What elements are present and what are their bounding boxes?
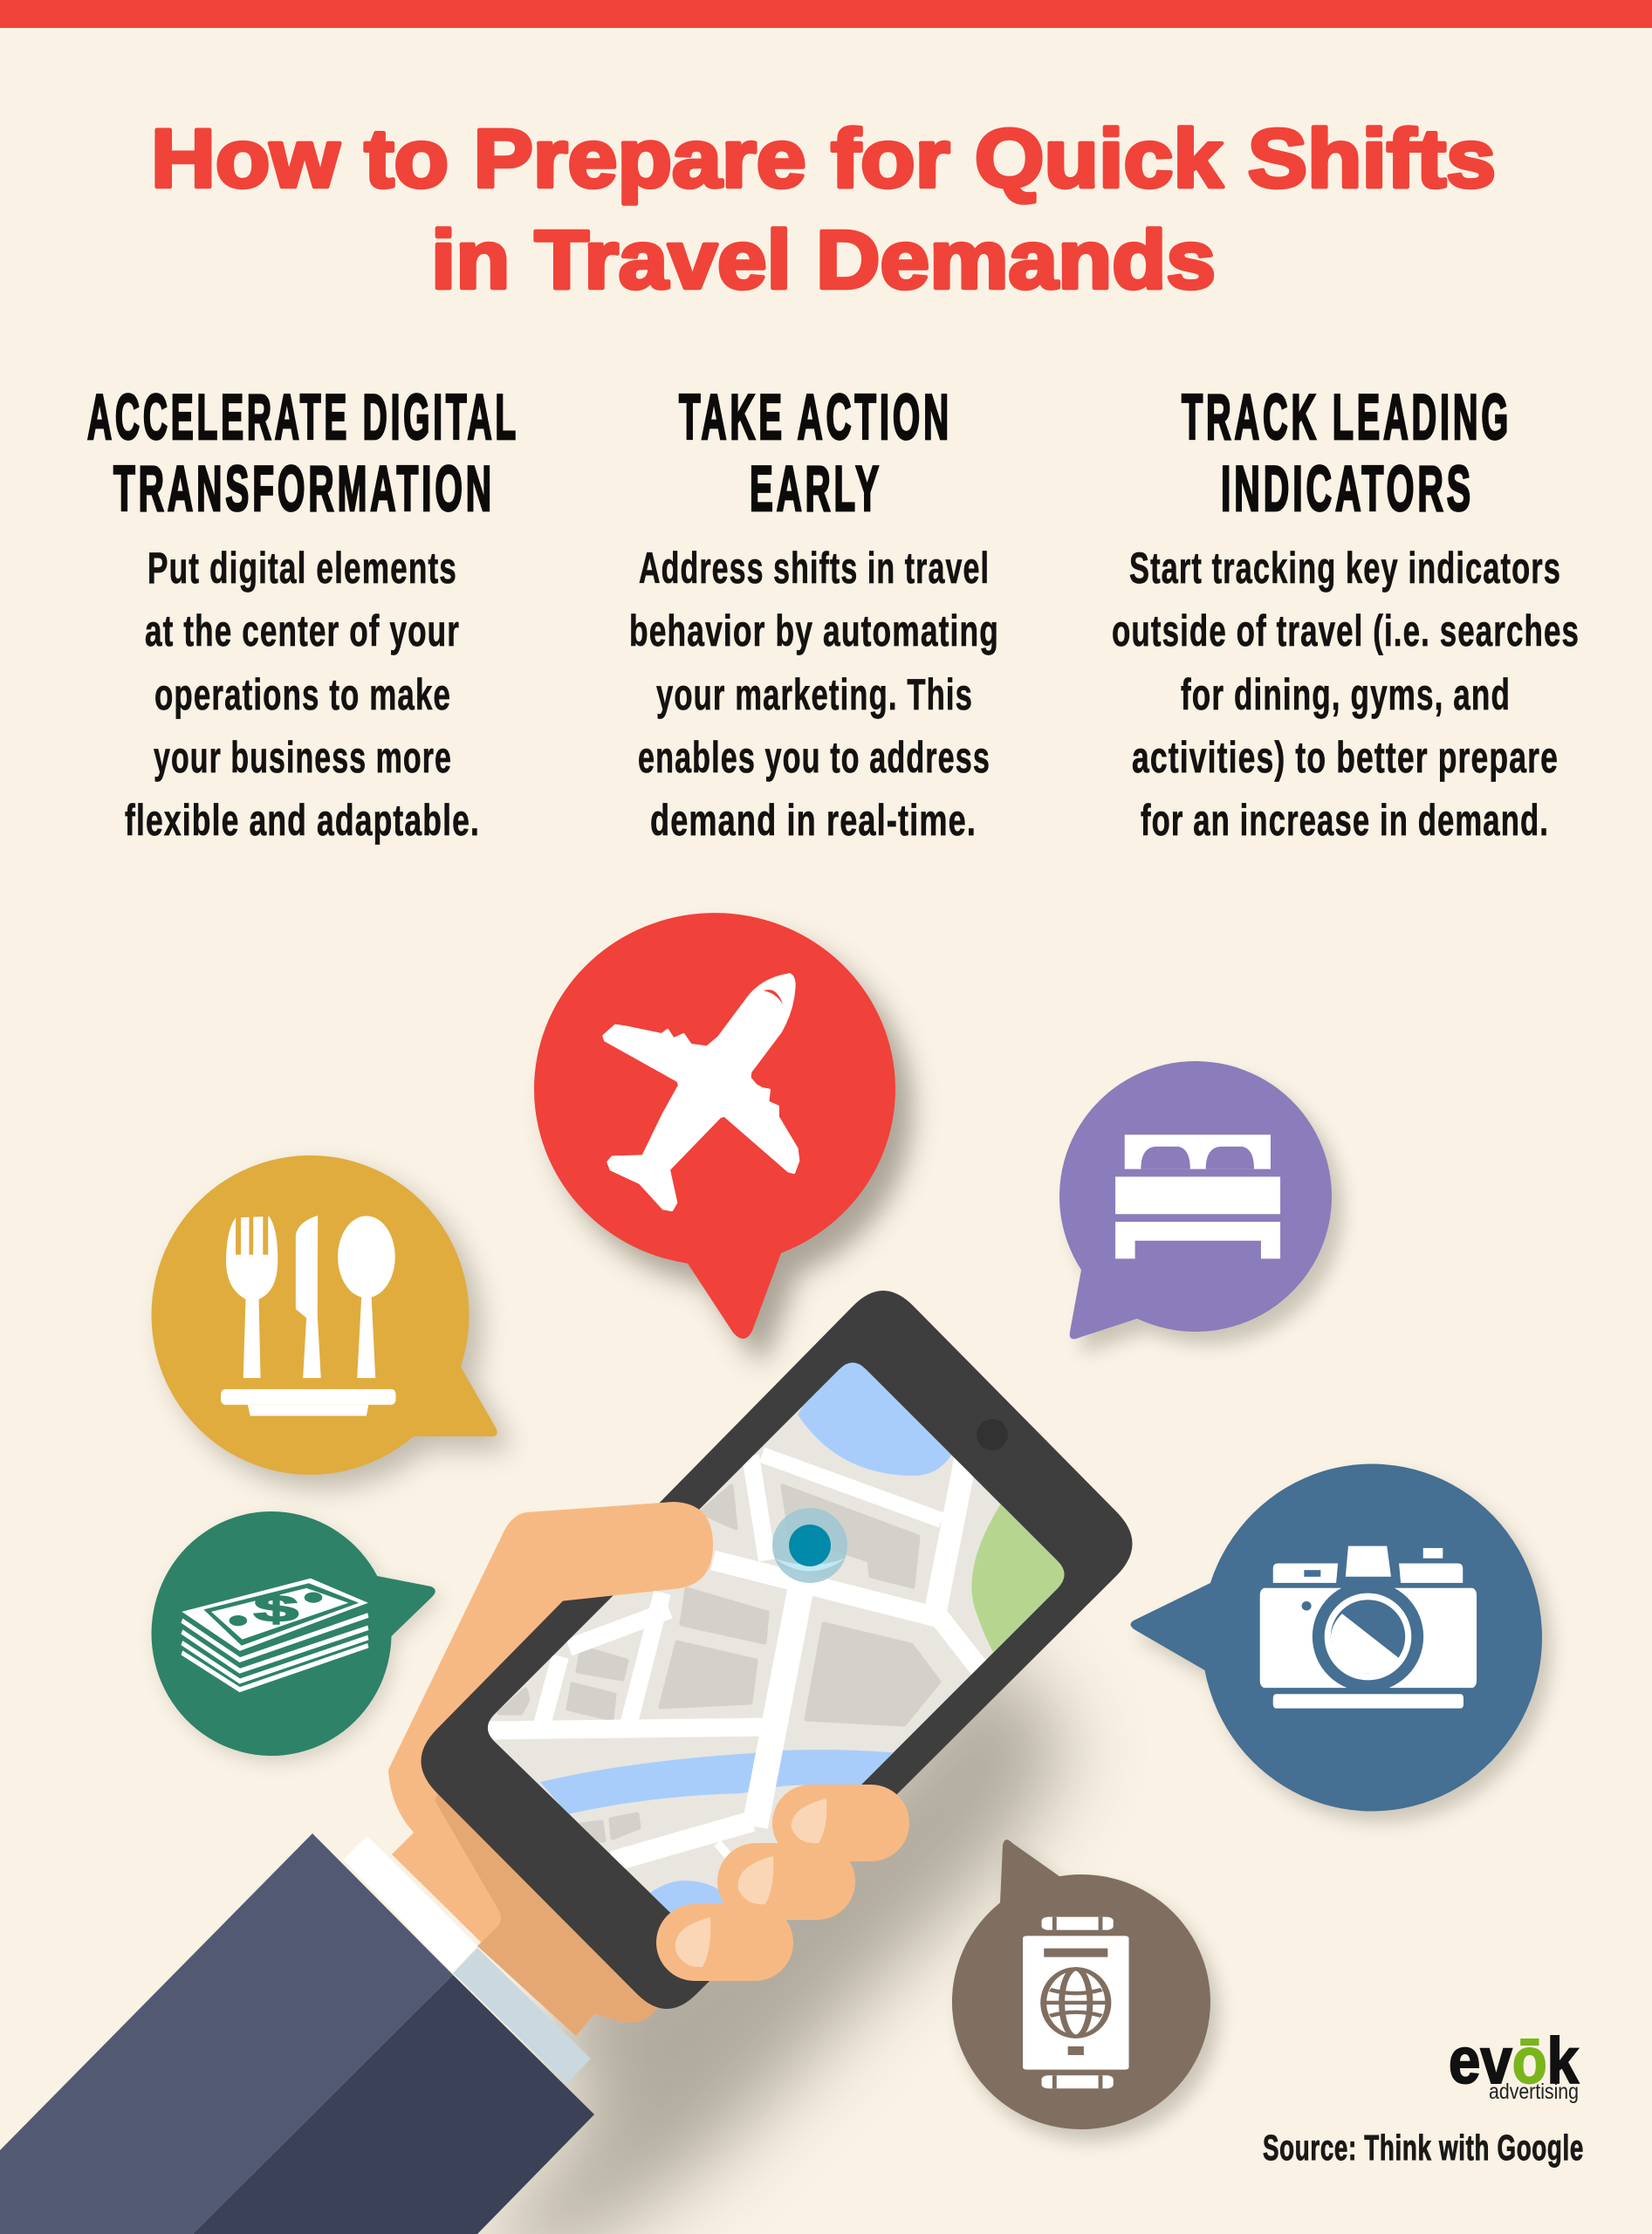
body text: track leading indicators: for dining, gyms, and xyxy=(1181,670,1511,719)
body text: take action early xyxy=(629,544,999,845)
heading: accelerate digital transformation: ACCELERATE DIGITAL xyxy=(87,382,519,453)
column 3: track leading indicators xyxy=(1112,382,1580,845)
body text: accelerate digital transformation: flexible and adaptable. xyxy=(125,796,480,845)
suit sleeve xyxy=(0,1833,594,2234)
heading: accelerate digital transformation: TRANSFORMATION xyxy=(113,454,495,524)
shirt cuff xyxy=(343,1836,591,2084)
body text: accelerate digital transformation: your business more xyxy=(154,733,452,782)
heading: accelerate digital transformation xyxy=(87,382,519,524)
cast shadow of phone and arm xyxy=(471,1641,1073,2234)
column 2: take action early xyxy=(629,382,999,845)
icon: camera xyxy=(1260,1546,1477,1709)
hand: three fingers gripping phone xyxy=(656,1785,909,1981)
map on screen xyxy=(488,1363,1065,1913)
smartphone xyxy=(421,1291,1133,2009)
icon: fork, knife, spoon on plate xyxy=(221,1215,396,1415)
speech bubble: airplane xyxy=(534,913,913,1360)
body text: take action early: behavior by automating xyxy=(629,606,999,655)
body text: accelerate digital transformation: Put digital elements xyxy=(147,544,457,593)
illustration: hand holding smartphone xyxy=(0,1291,1133,2234)
icon: passport xyxy=(1023,1917,1129,2088)
icon: airplane xyxy=(604,974,799,1210)
heading: take action early: TAKE ACTION xyxy=(679,382,952,453)
logo: evok advertising: advertising xyxy=(1489,2080,1579,2104)
front camera xyxy=(977,1419,1008,1450)
fingernails xyxy=(675,1799,826,1967)
body text: accelerate digital transformation: operations to make xyxy=(154,670,451,719)
speech bubble: money xyxy=(152,1511,441,1763)
column 1: accelerate digital transformation xyxy=(87,382,519,845)
speech bubble: hotel bed xyxy=(1059,1061,1343,1352)
body text: accelerate digital transformation xyxy=(125,544,480,845)
body text: take action early: Address shifts in travel xyxy=(639,544,990,593)
icon: stack of cash xyxy=(182,1579,368,1689)
hand: index finger over phone xyxy=(515,1502,713,1601)
body text: take action early: enables you to address xyxy=(638,733,991,782)
heading: track leading indicators xyxy=(1182,382,1511,524)
top accent bar xyxy=(0,0,1652,28)
speech bubble: camera xyxy=(1131,1464,1552,1823)
title xyxy=(151,113,1496,306)
body text: track leading indicators xyxy=(1112,544,1580,845)
icon: stack of cash: $ xyxy=(254,1588,298,1630)
title: in Travel Demands xyxy=(431,214,1216,306)
logo: evok advertising: evōk xyxy=(1449,2025,1580,2097)
icon: bed xyxy=(1115,1134,1280,1258)
phone body xyxy=(421,1291,1133,2009)
hand: palm behind phone xyxy=(388,1512,698,2036)
heading: take action early: EARLY xyxy=(750,454,882,524)
body text: take action early: demand in real-time. xyxy=(650,796,977,845)
speech bubble: passport xyxy=(952,1840,1219,2141)
speech bubble: dining xyxy=(152,1155,511,1489)
body text: take action early: your marketing. This xyxy=(656,670,973,719)
heading: take action early xyxy=(679,382,952,524)
title: How to Prepare for Quick Shifts xyxy=(151,113,1496,205)
location marker xyxy=(772,1508,847,1583)
body text: accelerate digital transformation: at the center of your xyxy=(145,606,460,655)
